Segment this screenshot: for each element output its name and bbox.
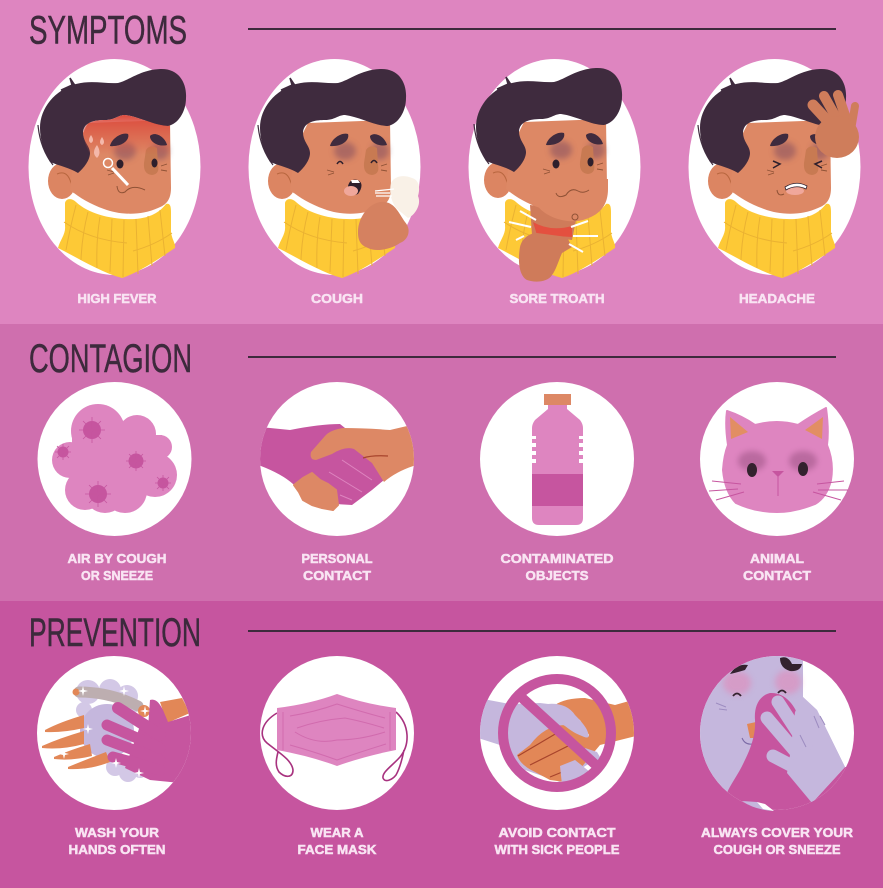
label: sore throat: SORE TROATH <box>510 291 604 306</box>
label: animal contact <box>743 551 811 583</box>
label: air by cough or sneeze: AIR BY COUGH <box>68 551 166 566</box>
label: wear a face mask: FACE MASK <box>298 842 377 857</box>
panel: prevention background <box>0 601 883 888</box>
label: always cover your cough or sneeze <box>701 825 854 857</box>
icon: animal contact cat <box>700 382 854 536</box>
label: wash your hands often: HANDS OFTEN <box>68 842 166 857</box>
heading: prevention: PREVENTION <box>29 611 201 655</box>
panel: symptoms background <box>0 0 883 324</box>
label: cough: COUGH <box>311 291 363 306</box>
icon: headache <box>688 59 860 278</box>
icon: air by cough or sneeze <box>38 382 192 536</box>
label: wash your hands often <box>68 825 166 857</box>
label: avoid contact with sick people: WITH SICK PEOPLE <box>494 842 620 857</box>
label: air by cough or sneeze: OR SNEEZE <box>81 568 153 583</box>
heading: contagion: CONTAGION <box>29 337 192 381</box>
icon: sore throat <box>468 59 640 282</box>
label: avoid contact with sick people: AVOID CONTACT <box>498 825 616 840</box>
label: contaminated objects: CONTAMINATED <box>500 551 614 566</box>
label: air by cough or sneeze <box>68 551 166 583</box>
icon: high fever <box>28 59 200 278</box>
label: always cover your cough or sneeze: COUGH OR SNEEZE <box>714 842 841 857</box>
label: always cover your cough or sneeze: ALWAYS COVER YOUR <box>701 825 854 840</box>
label: wear a face mask <box>298 825 377 857</box>
label: animal contact: CONTACT <box>743 568 811 583</box>
icon: avoid contact with sick people <box>478 656 640 810</box>
label: wear a face mask: WEAR A <box>310 825 364 840</box>
label: headache: HEADACHE <box>739 291 815 306</box>
heading rule: symptoms <box>248 28 836 30</box>
label: wash your hands often: WASH YOUR <box>75 825 160 840</box>
label: personal contact: CONTACT <box>303 568 371 583</box>
heading rule: prevention <box>248 630 836 632</box>
icon: wear a face mask <box>260 656 414 810</box>
icon: wash your hands <box>37 656 200 810</box>
icon: contaminated bottle <box>480 382 634 536</box>
icon: cough <box>248 59 420 278</box>
label: contaminated objects: OBJECTS <box>526 568 589 583</box>
label: high fever: HIGH FEVER <box>78 291 157 306</box>
icon: always cover your cough or sneeze <box>700 656 854 811</box>
label: personal contact <box>302 551 373 583</box>
heading: symptoms: SYMPTOMS <box>29 8 187 52</box>
label: avoid contact with sick people <box>494 825 620 857</box>
icon: personal contact handshake <box>250 382 420 536</box>
heading rule: contagion <box>248 356 836 358</box>
label: contaminated objects <box>500 551 614 583</box>
label: personal contact: PERSONAL <box>302 551 373 566</box>
label: animal contact: ANIMAL <box>750 551 804 566</box>
panel: contagion background <box>0 324 883 601</box>
